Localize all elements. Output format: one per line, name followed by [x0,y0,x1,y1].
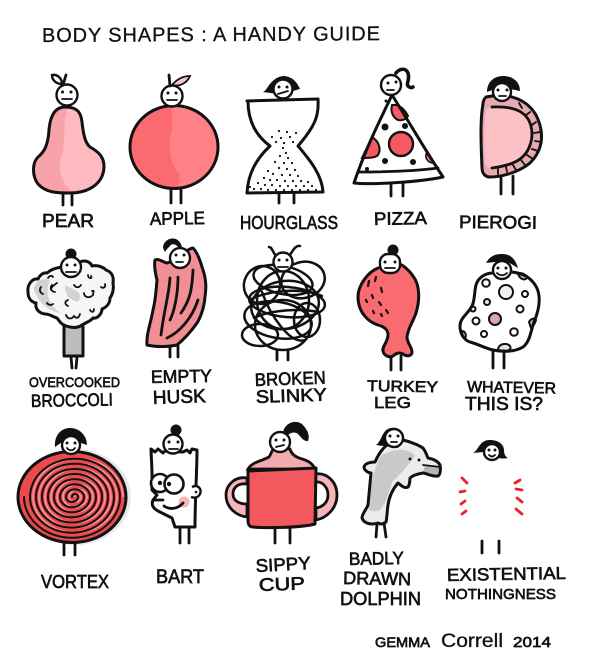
icon: vortex figure [18,428,131,555]
panel: hourglass [240,76,338,233]
panel: sippy cup [226,422,337,595]
label: whatever this is: THIS IS? [465,394,543,414]
icon: bart figure [151,424,201,543]
label: bart: BART [156,567,204,588]
icon: pierogi figure [481,76,542,194]
signature [375,631,551,652]
label: pizza: PIZZA [374,208,427,229]
label: turkey leg [367,378,438,412]
panel: pear [34,75,104,231]
label: badly drawn dolphin [340,548,421,609]
panel: turkey leg [358,244,438,412]
label: turkey leg: TURKEY [367,378,438,396]
icon: pear figure [34,75,104,205]
label: badly drawn dolphin: DOLPHIN [340,589,421,609]
panel: badly drawn dolphin [340,428,440,609]
label: overcooked broccoli [29,375,120,411]
signature: Correll [441,631,503,652]
label: pierogi: PIEROGI [459,212,537,233]
panel: whatever this is [460,254,556,414]
signature: 2014 [513,634,551,651]
panel: apple [130,75,218,229]
label: empty husk [151,366,212,409]
icon: hourglass figure [247,76,323,203]
label: broken slinky: SLINKY [255,385,327,407]
icon: apple figure [130,75,218,203]
label: empty husk: HUSK [152,386,206,409]
label: broken slinky: BROKEN [254,368,326,390]
icon: broccoli figure [28,248,113,368]
icon: turkey leg figure [358,244,419,370]
label: broken slinky [254,368,327,407]
panel: broken slinky [239,246,329,407]
label: whatever this is [465,379,556,414]
label: existential nothingness: EXISTENTIAL [447,563,566,585]
label: apple: APPLE [150,208,205,229]
label: sippy cup [255,553,311,595]
panel: existential nothingness [445,440,566,603]
label: existential nothingness [445,563,566,603]
icon: slinky figure [239,246,329,360]
signature: GEMMA [375,634,431,650]
panel: vortex [18,428,131,592]
label: sippy cup: SIPPY [255,553,311,576]
title: BODY SHAPES : A HANDY GUIDE [42,23,380,47]
label: badly drawn dolphin: BADLY [349,548,404,569]
label: pear: PEAR [42,211,94,231]
label: overcooked broccoli: BROCCOLI [31,390,113,411]
panel: overcooked broccoli [28,248,120,411]
icon: pizza figure [354,69,443,196]
icon: husk figure [147,238,206,357]
panel: pierogi [459,76,542,233]
icon: whatever figure [460,254,539,368]
panel: bart [151,424,204,588]
label: turkey leg: LEG [374,395,411,412]
label: empty husk: EMPTY [151,366,212,387]
label: hourglass: HOURGLASS [240,213,338,233]
label: existential nothingness: NOTHINGNESS [445,586,556,603]
label: vortex: VORTEX [41,572,109,592]
icon: dolphin figure [362,428,440,537]
panel: pizza [354,69,443,229]
label: badly drawn dolphin: DRAWN [343,568,411,589]
label: overcooked broccoli: OVERCOOKED [29,375,120,390]
label: sippy cup: CUP [258,573,305,595]
icon: sippy cup figure [226,422,337,543]
icon: invisible figure [460,440,522,553]
label: whatever this is: WHATEVER [467,379,556,398]
panel: empty husk [147,238,212,409]
